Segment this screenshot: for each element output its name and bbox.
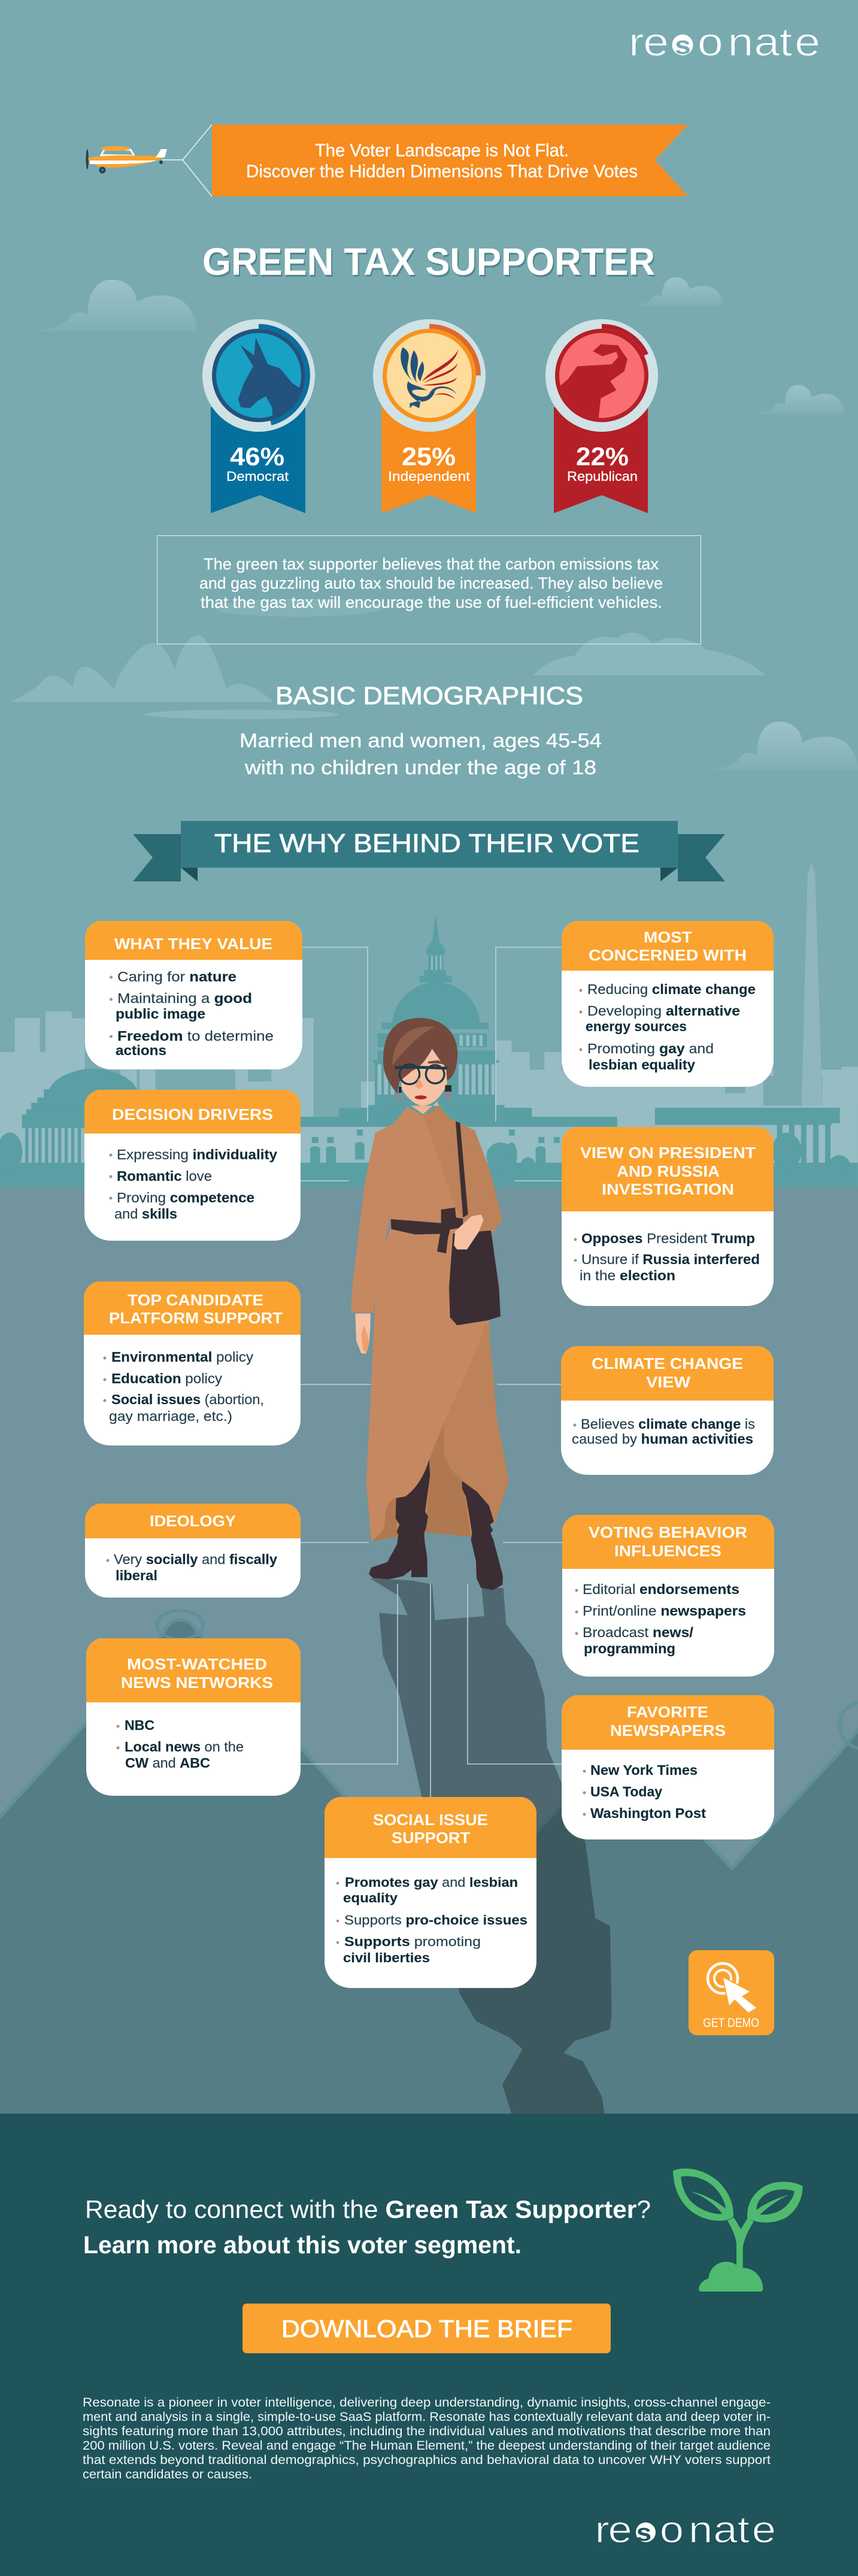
cloud right lower bbox=[711, 722, 858, 771]
panel: ideology bbox=[85, 1504, 301, 1598]
skyline: trees and arches bbox=[0, 1129, 850, 1187]
cloud large right bbox=[533, 632, 765, 675]
woman: lower body and boots bbox=[355, 1249, 509, 1590]
list: CW and ABC bbox=[125, 1755, 210, 1771]
list bbox=[583, 1762, 706, 1821]
list: Opposes President Trump bbox=[581, 1231, 755, 1246]
list: Supports pro-choice issues bbox=[344, 1913, 527, 1928]
list: liberal bbox=[116, 1568, 157, 1583]
heading: AND RUSSIA bbox=[617, 1162, 720, 1180]
icon: elephant bbox=[560, 344, 627, 418]
list: Supports promoting bbox=[344, 1934, 481, 1949]
woman: lips bbox=[415, 1095, 427, 1099]
top banner: The Voter Landscape is Not Flat. bbox=[315, 141, 569, 160]
list bbox=[107, 1551, 277, 1583]
list: Expressing individuality bbox=[117, 1147, 277, 1162]
list: and skills bbox=[114, 1206, 177, 1222]
ground bbox=[0, 1187, 858, 2114]
list bbox=[116, 1717, 244, 1771]
cloud behind description bbox=[213, 599, 383, 617]
panel: what they value bbox=[85, 921, 302, 1069]
list: civil liberties bbox=[343, 1950, 430, 1965]
badge: independent bbox=[373, 319, 486, 513]
woman: bag strap bbox=[456, 1122, 468, 1217]
cloud right middle bbox=[758, 385, 844, 414]
woman: right hand bbox=[454, 1214, 484, 1250]
woman bbox=[351, 1018, 509, 1590]
heading: NEWSPAPERS bbox=[610, 1722, 726, 1739]
demographics text: Married men and women, ages 45-54 bbox=[239, 729, 602, 751]
heading bbox=[580, 1144, 756, 1198]
heading bbox=[121, 1655, 273, 1692]
badge: democrat bbox=[202, 319, 315, 513]
list: Romantic love bbox=[117, 1168, 212, 1184]
about text: Resonate is a pioneer in voter intelligence, delivering deep understanding, dynamic insights, cross-channel engage- bbox=[83, 2396, 771, 2410]
panel: climate change view bbox=[561, 1346, 774, 1475]
heading: SUPPORT bbox=[392, 1829, 470, 1847]
list: Developing alternative bbox=[587, 1003, 740, 1019]
plane towing banner bbox=[86, 125, 212, 196]
top banner: Discover the Hidden Dimensions That Drive Votes bbox=[246, 162, 638, 181]
badge: independent: Independent bbox=[388, 469, 470, 484]
list: Local news on the bbox=[125, 1739, 244, 1754]
heading: IDEOLOGY bbox=[150, 1512, 236, 1530]
list: Believes climate change is bbox=[581, 1416, 755, 1432]
heading bbox=[373, 1811, 488, 1847]
list bbox=[336, 1875, 527, 1965]
woman: hair bbox=[383, 1018, 457, 1094]
cloud thin bbox=[144, 710, 339, 719]
icon: donkey bbox=[238, 337, 300, 419]
list: Very socially and fiscally bbox=[114, 1551, 277, 1567]
list: Environmental policy bbox=[111, 1349, 254, 1365]
about text: certain candidates or causes. bbox=[83, 2468, 252, 2481]
list: lesbian equality bbox=[589, 1057, 695, 1072]
list bbox=[109, 1147, 277, 1222]
connector lines bbox=[301, 947, 562, 1797]
list: New York Times bbox=[590, 1762, 698, 1778]
get demo button: GET DEMO bbox=[703, 2016, 759, 2030]
description box bbox=[157, 535, 701, 644]
woman: belt bbox=[391, 1208, 463, 1253]
logo: resonate bottom: re bbox=[595, 2509, 632, 2551]
heading bbox=[589, 928, 747, 964]
icon: click cursor bbox=[708, 1963, 756, 2013]
logo: resonate top: onate bbox=[698, 20, 820, 65]
description box: The green tax supporter believes that the carbon emissions tax bbox=[204, 555, 659, 573]
panel: social issue support bbox=[325, 1797, 536, 1988]
panel: view on president bbox=[562, 1127, 774, 1306]
heading: INFLUENCES bbox=[614, 1542, 721, 1560]
list: equality bbox=[343, 1890, 398, 1905]
heading: WHAT THEY VALUE bbox=[114, 935, 272, 953]
sky background bbox=[0, 0, 858, 1187]
panel: most concerned with bbox=[562, 921, 774, 1087]
footer panel bbox=[0, 2114, 858, 2576]
heading: MOST-WATCHED bbox=[127, 1655, 267, 1673]
logo: resonate bottom: s bbox=[636, 2520, 651, 2546]
list: energy sources bbox=[586, 1019, 687, 1034]
woman: left boot bbox=[369, 1459, 430, 1579]
heading: PLATFORM SUPPORT bbox=[109, 1309, 283, 1327]
list: Washington Post bbox=[590, 1805, 706, 1821]
badge: democrat: Democrat bbox=[226, 469, 289, 484]
badge: independent: 25% bbox=[402, 443, 456, 471]
list: Print/online newspapers bbox=[583, 1603, 746, 1619]
skyline: right memorial bbox=[655, 1108, 840, 1164]
list: Reducing climate change bbox=[587, 981, 756, 997]
badge: republican bbox=[533, 319, 658, 513]
call to action text: Learn more about this voter segment. bbox=[83, 2231, 522, 2259]
list bbox=[103, 1349, 264, 1424]
logo: resonate bottom: onate bbox=[660, 2509, 776, 2551]
mountain peak ring right bbox=[840, 1702, 858, 1748]
heading bbox=[610, 1703, 726, 1739]
woman: bag bbox=[449, 1231, 501, 1325]
skyline bbox=[0, 862, 858, 1189]
panel: favorite newspapers bbox=[562, 1695, 774, 1839]
heading: VOTING BEHAVIOR bbox=[589, 1523, 747, 1541]
logo: resonate top: s bbox=[675, 31, 691, 59]
list bbox=[574, 1231, 760, 1283]
badge: republican: 22% bbox=[576, 443, 629, 471]
list: Caring for nature bbox=[117, 969, 237, 984]
woman: neck bbox=[411, 1102, 439, 1114]
list bbox=[572, 1416, 755, 1447]
about text: 200 million U.S. voters. Reveal and engage “The Human Element,” the deepest understanding of their target audience bbox=[83, 2439, 771, 2453]
heading: CLIMATE CHANGE bbox=[592, 1354, 743, 1372]
list: Unsure if Russia interfered bbox=[581, 1251, 760, 1267]
demographics text bbox=[239, 729, 602, 778]
download button bbox=[242, 2304, 611, 2353]
cloud right upper bbox=[635, 277, 723, 305]
list: Education policy bbox=[111, 1371, 223, 1386]
about text: sights featuring more than 13,000 attributes, including the individual values and motivations that describe more than bbox=[83, 2425, 771, 2438]
panel: top candidate platform support bbox=[84, 1281, 301, 1445]
woman: left hand bbox=[355, 1314, 371, 1354]
list: USA Today bbox=[590, 1784, 662, 1799]
heading: INVESTIGATION bbox=[602, 1180, 734, 1198]
about text: ment and analysis in a single, simple-to-use SaaS platform. Resonate has contextually relevant data and deep voter in- bbox=[83, 2410, 771, 2424]
heading bbox=[589, 1523, 747, 1560]
heading: MOST bbox=[644, 928, 692, 946]
list: Broadcast news/ bbox=[583, 1625, 694, 1640]
heading: FAVORITE bbox=[627, 1703, 708, 1721]
list: Editorial endorsements bbox=[583, 1581, 739, 1597]
heading: DECISION DRIVERS bbox=[112, 1105, 273, 1123]
list: caused by human activities bbox=[572, 1431, 753, 1447]
woman: right boot bbox=[462, 1481, 503, 1590]
list: Promotes gay and lesbian bbox=[345, 1875, 518, 1890]
skyline: capitol bbox=[300, 914, 617, 1127]
list: gay marriage, etc.) bbox=[109, 1408, 232, 1424]
title: GREEN TAX SUPPORTER bbox=[202, 240, 655, 283]
about text bbox=[83, 2396, 771, 2481]
woman's shadow bbox=[370, 1578, 612, 2114]
download button: DOWNLOAD THE BRIEF bbox=[281, 2315, 572, 2342]
heading: SOCIAL ISSUE bbox=[373, 1811, 488, 1829]
list: actions bbox=[116, 1042, 166, 1058]
panel: most-watched news networks bbox=[86, 1638, 301, 1796]
list: programming bbox=[584, 1641, 675, 1656]
get demo button bbox=[689, 1950, 774, 2035]
icon: sprout bbox=[673, 2168, 803, 2292]
skyline: capitol columns bbox=[378, 955, 495, 1095]
icon: eagle bbox=[401, 347, 458, 408]
demographics text: with no children under the age of 18 bbox=[244, 756, 596, 778]
list: Social issues (abortion, bbox=[111, 1392, 264, 1407]
list: public image bbox=[116, 1006, 205, 1022]
list: NBC bbox=[125, 1717, 154, 1733]
woman: left sleeve bbox=[351, 1287, 376, 1313]
woman: face bbox=[401, 1048, 447, 1106]
heading: TOP CANDIDATE bbox=[128, 1291, 263, 1309]
panel: decision drivers bbox=[84, 1090, 301, 1241]
heading: VIEW bbox=[646, 1373, 691, 1391]
badge: democrat: 46% bbox=[230, 443, 284, 471]
list bbox=[580, 981, 756, 1072]
description box: and gas guzzling auto tax should be increased. They also believe bbox=[199, 574, 663, 592]
heading: CONCERNED WITH bbox=[589, 946, 747, 964]
top banner bbox=[212, 125, 688, 196]
why banner bbox=[133, 821, 725, 881]
woman: nose bbox=[415, 1078, 423, 1089]
logo: resonate bottom bbox=[595, 2509, 776, 2551]
about text: that extends beyond traditional demographics, psychographics and behavioral data to uncover WHY voters support bbox=[83, 2453, 771, 2467]
heading bbox=[109, 1291, 283, 1327]
logo: resonate top: re bbox=[629, 20, 669, 65]
woman: upper body bbox=[351, 1018, 502, 1325]
list bbox=[110, 969, 274, 1058]
list: in the election bbox=[580, 1268, 675, 1283]
skyline: left memorial bbox=[0, 1069, 137, 1187]
list: Proving competence bbox=[117, 1190, 254, 1205]
mountain peak ring left bbox=[157, 1611, 203, 1639]
badge: republican: Republican bbox=[567, 469, 638, 484]
list: Freedom to determine bbox=[117, 1028, 274, 1044]
heading: basic demographics: BASIC DEMOGRAPHICS bbox=[275, 681, 583, 710]
panel: voting behavior influences bbox=[562, 1515, 774, 1677]
description box: that the gas tax will encourage the use of fuel-efficient vehicles. bbox=[201, 593, 662, 611]
call to action text bbox=[83, 2195, 651, 2259]
heading bbox=[592, 1354, 743, 1391]
heading: VIEW ON PRESIDENT bbox=[580, 1144, 756, 1162]
list: Maintaining a good bbox=[117, 990, 252, 1006]
woman: earrings bbox=[395, 1085, 453, 1102]
mountains bbox=[0, 1611, 858, 2117]
list: Promoting gay and bbox=[587, 1041, 714, 1056]
logo: resonate top bbox=[629, 20, 820, 65]
call to action text: Ready to connect with the Green Tax Supporter? bbox=[85, 2195, 651, 2223]
cloud large left bbox=[12, 635, 274, 702]
woman: eyebrow bbox=[428, 1060, 445, 1064]
why banner: THE WHY BEHIND THEIR VOTE bbox=[214, 829, 639, 858]
woman: glasses bbox=[395, 1064, 447, 1084]
heading: NEWS NETWORKS bbox=[121, 1674, 273, 1692]
cloud left bbox=[38, 280, 197, 331]
list bbox=[575, 1581, 746, 1656]
